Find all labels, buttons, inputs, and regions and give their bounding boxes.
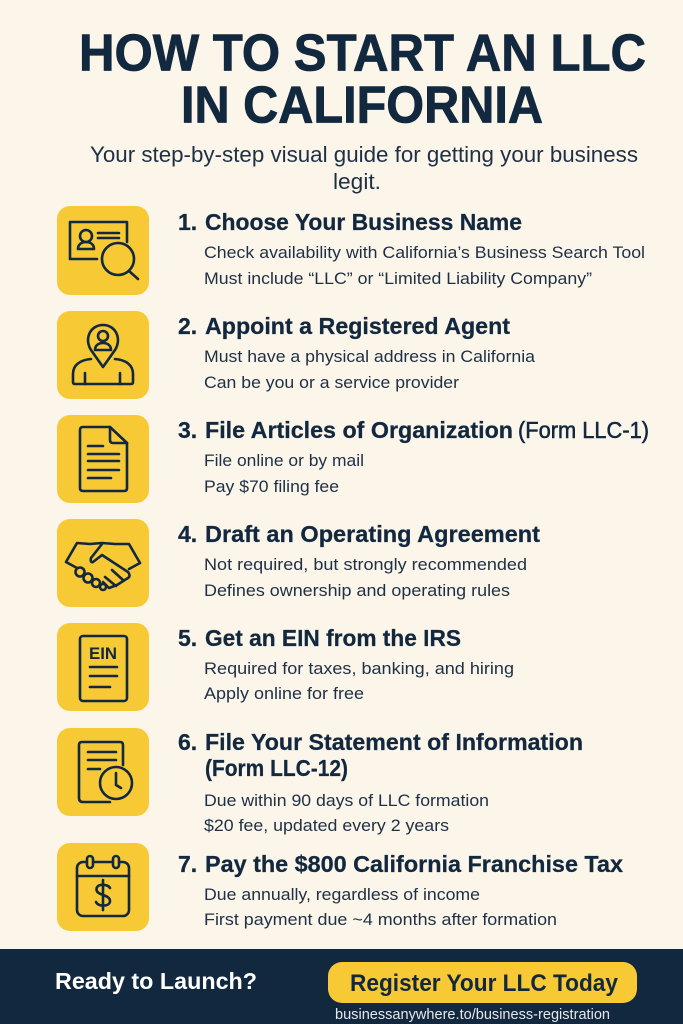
- step 5: get an ein: [57, 623, 514, 711]
- step 2 heading: Appoint a Registered Agent: [205, 313, 510, 339]
- title: HOW TO START AN LLC: [79, 24, 646, 82]
- step 7: pay franchise tax: [57, 843, 623, 931]
- step 2 details: Must have a physical address in California: [204, 347, 536, 366]
- icon: calendar with dollar sign: [57, 843, 149, 931]
- step 3 heading: File Articles of Organization: [205, 417, 513, 443]
- step 4: draft an operating agreement: [57, 519, 540, 607]
- step 6 heading: File Your Statement of Information: [205, 729, 583, 755]
- step 6 heading: (Form LLC-12): [205, 755, 348, 781]
- step 7 details: [204, 885, 557, 929]
- step 3 details: File online or by mail: [204, 451, 364, 470]
- icon: handshake: [57, 519, 149, 607]
- subtitle: [90, 142, 638, 194]
- title: IN CALIFORNIA: [181, 76, 543, 134]
- step 6 details: $20 fee, updated every 2 years: [204, 816, 449, 835]
- step 5 heading: 5.: [178, 625, 197, 651]
- subtitle: legit.: [333, 169, 381, 194]
- step 7 details: First payment due ~4 months after formation: [204, 910, 557, 929]
- step 6 details: Due within 90 days of LLC formation: [204, 791, 489, 810]
- icon: document: [57, 415, 149, 503]
- step 1 heading: Choose Your Business Name: [205, 209, 522, 235]
- step 7 details: Due annually, regardless of income: [204, 885, 480, 904]
- website url: businessanywhere.to/business-registration: [335, 1006, 610, 1023]
- icon: id card with magnifier: [57, 206, 149, 295]
- step 6: file statement of information: [57, 728, 583, 835]
- step 1 heading: 1.: [178, 209, 197, 235]
- step 1 details: [204, 243, 645, 288]
- step 7 heading: Pay the $800 California Franchise Tax: [205, 851, 623, 877]
- call to action text: Ready to Launch?: [55, 968, 257, 994]
- footer banner: [0, 949, 683, 1024]
- step 4 details: Defines ownership and operating rules: [204, 581, 510, 600]
- step 2: appoint a registered agent: [57, 311, 536, 399]
- step 5 details: Required for taxes, banking, and hiring: [204, 659, 514, 678]
- step 4 details: Not required, but strongly recommended: [204, 555, 527, 574]
- step 5 heading: Get an EIN from the IRS: [205, 625, 461, 651]
- step 2 details: Can be you or a service provider: [204, 373, 459, 392]
- button: register: [328, 962, 637, 1003]
- step 3 heading: (Form LLC-1): [518, 417, 649, 443]
- step 1 details: Check availability with California’s Business Search Tool: [204, 243, 645, 262]
- step 2 details: [204, 347, 536, 392]
- step 4 details: [204, 555, 527, 600]
- button: register: Register Your LLC Today: [350, 970, 619, 997]
- step 4 heading: 4.: [178, 521, 197, 547]
- step 6 details: [204, 791, 489, 835]
- step 6 heading: 6.: [178, 729, 197, 755]
- step 3 heading: 3.: [178, 417, 197, 443]
- icon: person with location pin: [57, 311, 149, 399]
- step 3 details: [204, 451, 364, 496]
- step 4 heading: Draft an Operating Agreement: [205, 521, 540, 547]
- step 3: file articles of organization: [57, 415, 649, 503]
- icon: document with clock: [57, 728, 149, 816]
- step 3 details: Pay $70 filing fee: [204, 477, 339, 496]
- step 7 heading: 7.: [178, 851, 197, 877]
- icon: EIN document: [57, 623, 149, 711]
- icon: EIN document: EIN: [89, 644, 117, 663]
- step 1: choose your business name: [57, 206, 645, 295]
- step 5 details: [204, 659, 514, 703]
- step 5 details: Apply online for free: [204, 684, 364, 703]
- step 2 heading: 2.: [178, 313, 197, 339]
- title: [79, 24, 646, 134]
- subtitle: Your step-by-step visual guide for getting your business: [90, 142, 638, 167]
- step 1 details: Must include “LLC” or “Limited Liability Company”: [204, 269, 592, 288]
